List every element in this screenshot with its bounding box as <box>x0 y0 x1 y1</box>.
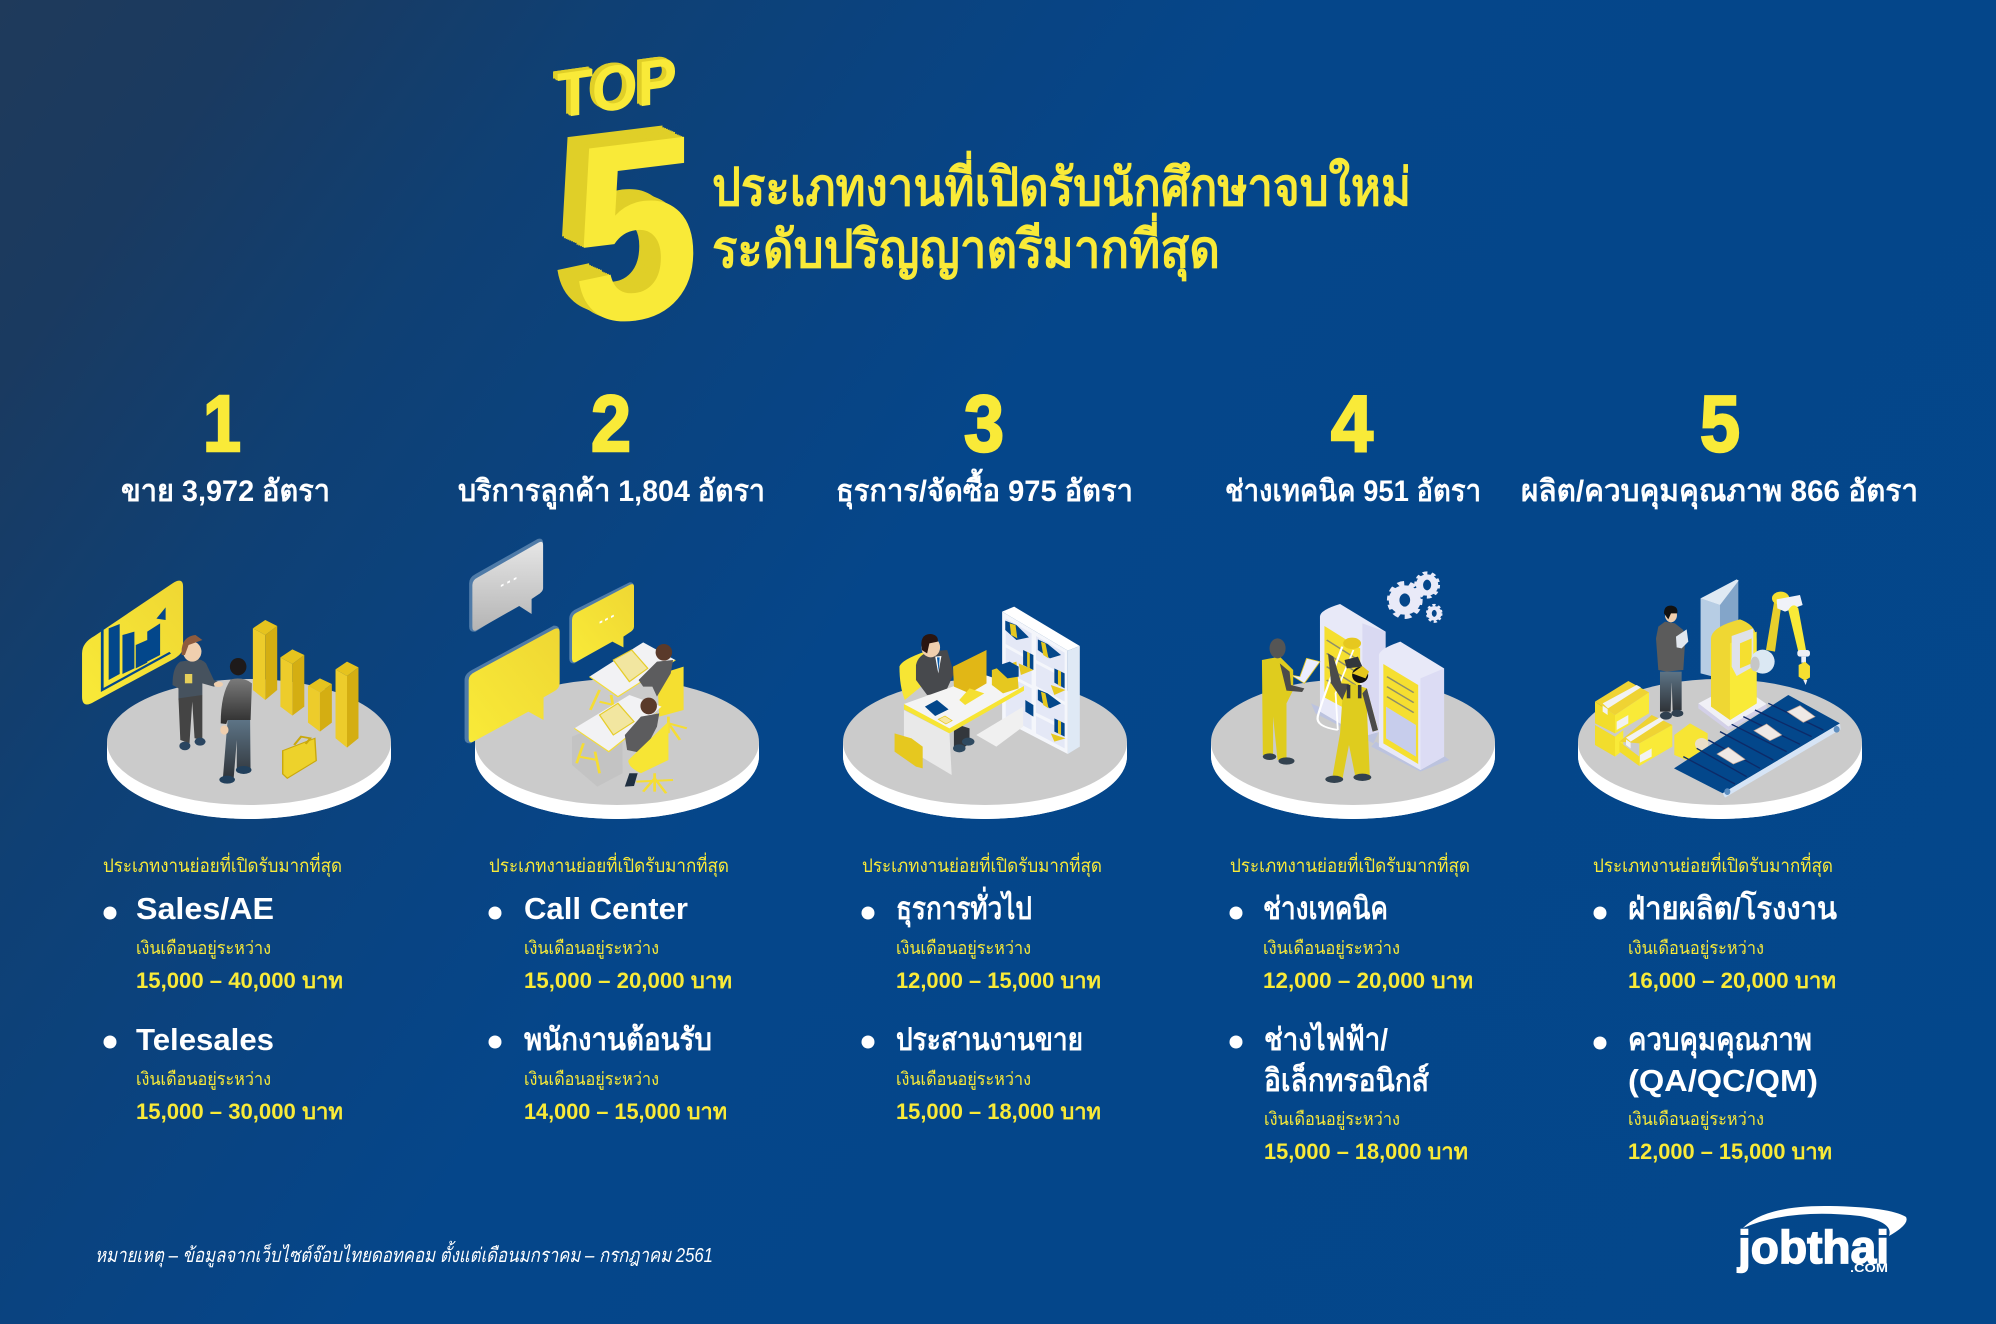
title graphic: extruded number 5: 5 <box>572 80 700 381</box>
category count 4: ช่างเทคนิค 951 อัตรา <box>1225 475 1481 508</box>
rank number 5: 5 <box>1700 379 1740 468</box>
bullet item: quality control: (QA/QC/QM) <box>1628 1063 1818 1098</box>
bullet item: Telesales: Telesales <box>136 1022 274 1057</box>
bullet item: quality control: เงินเดือนอยู่ระหว่าง <box>1628 1109 1764 1130</box>
sub category heading 5: ประเภทงานย่อยที่เปิดรับมากที่สุด <box>1593 852 1833 878</box>
title text: ประเภทงานที่เปิดรับนักศึกษาจบใหม่ <box>712 151 1411 217</box>
panel: rank 5 production and QC <box>1521 379 1918 1164</box>
illustration: office desk and shelf on platform <box>843 607 1127 819</box>
rank number 2: 2 <box>591 379 631 468</box>
sub category heading 1: ประเภทงานย่อยที่เปิดรับมากที่สุด <box>103 852 342 878</box>
bullet item: Sales/AE: เงินเดือนอยู่ระหว่าง <box>136 938 271 959</box>
illustration: sales team and bar chart on platform <box>82 581 391 819</box>
bullet item: Call Center: เงินเดือนอยู่ระหว่าง <box>524 938 659 959</box>
illustration: factory robot and conveyor on platform <box>1578 579 1862 819</box>
bullet item: Call Center: Call Center <box>524 891 688 926</box>
bullet item: technician <box>1230 891 1473 993</box>
panel: rank 3 admin and purchasing <box>836 379 1133 1124</box>
bullet item: electrician: 15,000 – 18,000 บาท <box>1264 1139 1468 1164</box>
bullet item: electrician <box>1230 1021 1468 1164</box>
title text <box>712 151 1411 282</box>
bullet item: quality control: ควบคุมคุณภาพ <box>1628 1022 1812 1059</box>
bullet item: general admin <box>862 886 1101 993</box>
bullet item: factory: ฝ่ายผลิต/โรงงาน <box>1628 890 1837 926</box>
logo: jobthai.com <box>1737 1206 1907 1275</box>
bullet item: general admin: ธุรการทั่วไป <box>896 886 1032 928</box>
rank number 3: 3 <box>964 379 1004 468</box>
bullet item: receptionist: 14,000 – 15,000 บาท <box>524 1099 727 1124</box>
panel: rank 1 sales <box>82 379 391 1124</box>
bullet item: general admin: เงินเดือนอยู่ระหว่าง <box>896 938 1031 959</box>
illustration: technicians and servers on platform <box>1211 573 1495 819</box>
logo: jobthai.com: jobthai <box>1737 1221 1889 1273</box>
bullet item: factory: เงินเดือนอยู่ระหว่าง <box>1628 938 1764 959</box>
sub category heading 4: ประเภทงานย่อยที่เปิดรับมากที่สุด <box>1230 852 1470 878</box>
bullet item: quality control: 12,000 – 15,000 บาท <box>1628 1139 1832 1164</box>
bullet item: Call Center: 15,000 – 20,000 บาท <box>524 968 732 993</box>
sub category heading 2: ประเภทงานย่อยที่เปิดรับมากที่สุด <box>489 852 729 878</box>
panel: rank 2 customer service <box>458 379 765 1124</box>
bullet item: electrician: ช่างไฟฟ้า/ <box>1264 1021 1388 1057</box>
bullet item: general admin: 12,000 – 15,000 บาท <box>896 968 1101 993</box>
bullet item: factory: 16,000 – 20,000 บาท <box>1628 968 1836 993</box>
bullet item: Sales/AE <box>104 891 343 993</box>
title graphic: extruded TOP: TOP <box>557 43 677 132</box>
bullet item: Telesales: 15,000 – 30,000 บาท <box>136 1099 343 1124</box>
category count 1: ขาย 3,972 อัตรา <box>121 475 330 508</box>
panel: rank 4 technician <box>1211 379 1495 1164</box>
bullet item: electrician: เงินเดือนอยู่ระหว่าง <box>1264 1109 1400 1130</box>
bullet item: Telesales <box>104 1022 343 1124</box>
rank number 4: 4 <box>1331 379 1373 468</box>
bullet item: receptionist: เงินเดือนอยู่ระหว่าง <box>524 1069 659 1090</box>
title text: ระดับปริญญาตรีมากที่สุด <box>712 213 1220 282</box>
bullet item: technician: ช่างเทคนิค <box>1263 891 1388 926</box>
rank number 1: 1 <box>203 379 241 468</box>
bullet item: receptionist <box>488 1022 727 1124</box>
sub category heading 3: ประเภทงานย่อยที่เปิดรับมากที่สุด <box>862 852 1102 878</box>
bullet item: Sales/AE: 15,000 – 40,000 บาท <box>136 968 343 993</box>
bullet item: quality control <box>1594 1022 1832 1164</box>
bullet item: Call Center <box>488 891 732 993</box>
bullet item: factory <box>1594 890 1837 993</box>
footnote: หมายเหตุ – ข้อมูลจากเว็บไซต์จ๊อบไทยดอทคอม ตั้งแต่เดือนมกราคม – กรกฎาคม 2561 <box>95 1240 713 1268</box>
category count 3: ธุรการ/จัดซื้อ 975 อัตรา <box>836 468 1133 510</box>
logo: jobthai.com: .COM <box>1850 1261 1888 1275</box>
bullet item: sales coordinator: ประสานงานขาย <box>896 1022 1083 1057</box>
bullet item: receptionist: พนักงานต้อนรับ <box>524 1022 712 1057</box>
category count 2: บริการลูกค้า 1,804 อัตรา <box>458 475 765 510</box>
bullet item: sales coordinator: 15,000 – 18,000 บาท <box>896 1099 1101 1124</box>
bullet item: electrician: อิเล็กทรอนิกส์ <box>1264 1061 1429 1098</box>
bullet item: Sales/AE: Sales/AE <box>136 891 274 926</box>
illustration: call center with speech bubbles on platform <box>465 539 759 819</box>
bullet item: technician: 12,000 – 20,000 บาท <box>1263 968 1473 993</box>
bullet item: Telesales: เงินเดือนอยู่ระหว่าง <box>136 1069 271 1090</box>
bullet item: sales coordinator: เงินเดือนอยู่ระหว่าง <box>896 1069 1031 1090</box>
category count 5: ผลิต/ควบคุมคุณภาพ 866 อัตรา <box>1521 475 1918 510</box>
bullet item: sales coordinator <box>862 1022 1101 1124</box>
bullet item: technician: เงินเดือนอยู่ระหว่าง <box>1263 938 1400 959</box>
